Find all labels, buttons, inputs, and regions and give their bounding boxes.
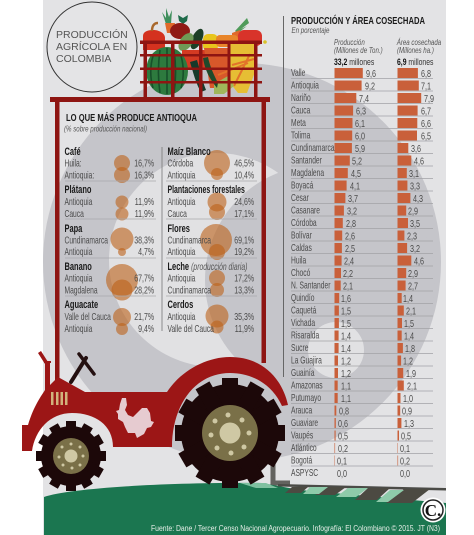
production values: 1,2 bbox=[341, 355, 351, 367]
right column labels: Flores bbox=[167, 221, 190, 234]
row lines bbox=[291, 78, 433, 466]
column header: área cosechada bbox=[396, 37, 441, 67]
department labels: Amazonas bbox=[291, 379, 323, 391]
department labels: Meta bbox=[291, 117, 306, 128]
column header: producción: (Millones de Ton.) bbox=[334, 46, 383, 55]
area values: 2,9 bbox=[408, 205, 418, 217]
production values: 7,4 bbox=[359, 93, 369, 104]
production values: 4,5 bbox=[351, 168, 361, 179]
left column values: 21,7% bbox=[134, 311, 154, 322]
production values: 2,2 bbox=[343, 268, 353, 279]
production values: 3,2 bbox=[347, 205, 357, 217]
production values: 2,4 bbox=[344, 255, 354, 267]
icon: crate of vegetables bbox=[140, 8, 267, 97]
production values: 3,7 bbox=[348, 193, 358, 204]
area values: 1,5 bbox=[404, 318, 414, 329]
production values: 5,2 bbox=[352, 155, 362, 167]
right column labels: Leche (producción diaria) bbox=[167, 259, 248, 272]
title circle: PRODUCCIÓN bbox=[56, 28, 128, 41]
production values: 2,6 bbox=[345, 230, 355, 242]
area values: 6,5 bbox=[421, 130, 431, 142]
right column labels: Plantaciones forestales bbox=[167, 183, 245, 195]
left column values: 11,9% bbox=[135, 196, 154, 207]
left column values: 4,7% bbox=[138, 246, 154, 257]
area values: 7,9 bbox=[424, 93, 434, 104]
production values: 0,1 bbox=[337, 455, 347, 467]
production values: 1,2 bbox=[341, 368, 351, 379]
production values: 0,6 bbox=[338, 418, 348, 429]
area values: 3,1 bbox=[409, 168, 419, 179]
column header: producción bbox=[334, 38, 383, 67]
left column labels: Antioquia bbox=[65, 196, 93, 207]
right column labels: Cerdos bbox=[167, 297, 193, 310]
left column labels: Antioquia bbox=[65, 272, 93, 284]
department labels: Guaviare bbox=[291, 417, 318, 428]
production values: 6,3 bbox=[356, 105, 366, 117]
department labels: Putumayo bbox=[291, 392, 321, 403]
area values: 2,1 bbox=[406, 305, 416, 317]
tractor body bbox=[22, 357, 288, 451]
left column values: 16,7% bbox=[134, 157, 154, 169]
area values: 0,1 bbox=[400, 443, 410, 454]
department labels: Cundinamarca bbox=[291, 142, 335, 153]
left column labels: Plátano bbox=[64, 182, 92, 195]
right column labels: Cundinamarca bbox=[167, 284, 211, 296]
right column values: 13,3% bbox=[234, 284, 254, 296]
left column labels: Cundinamarca bbox=[65, 234, 108, 246]
right column values: 19,2% bbox=[234, 246, 254, 257]
department labels: Antioquia bbox=[291, 79, 319, 91]
production values: 5,9 bbox=[355, 143, 365, 154]
area values: 3,6 bbox=[411, 143, 421, 154]
right column labels: Antioquia bbox=[167, 196, 196, 207]
department labels: Arauca bbox=[291, 404, 312, 416]
department labels: Caquetá bbox=[291, 304, 317, 316]
right column labels bbox=[168, 144, 248, 334]
right column labels: Antioquia bbox=[167, 169, 196, 181]
right column labels: Córdoba bbox=[167, 157, 193, 169]
production values: 6,0 bbox=[355, 130, 365, 142]
area values: 3,5 bbox=[410, 218, 420, 229]
department labels: Córdoba bbox=[291, 217, 317, 228]
icon: tractor bbox=[22, 351, 288, 491]
left column labels: Antioquia bbox=[65, 323, 93, 334]
front wheel bbox=[36, 421, 106, 491]
column header: producción: 33,2 millones bbox=[334, 57, 374, 67]
panel: production and harvested area bbox=[284, 14, 441, 479]
production values: 1,5 bbox=[341, 318, 351, 329]
area values: 7,1 bbox=[421, 80, 431, 92]
department labels: Valle bbox=[291, 67, 306, 78]
area values: 1,0 bbox=[403, 393, 413, 404]
right column labels: Cundinamarca bbox=[167, 234, 211, 246]
right column values: 24,6% bbox=[234, 196, 254, 207]
area values: 0,5 bbox=[401, 430, 411, 442]
heading: producción y área cosechada: PRODUCCIÓN Y ÁREA COSECHADA bbox=[291, 14, 425, 27]
icon: map of Antioquia bbox=[116, 398, 154, 438]
area values: 2,7 bbox=[408, 280, 418, 292]
department labels: Cesar bbox=[291, 192, 309, 203]
department labels: Caldas bbox=[291, 242, 312, 253]
area values bbox=[400, 68, 434, 479]
production values: 1,1 bbox=[341, 393, 351, 404]
column header: área cosechada: 6,9 millones bbox=[397, 57, 433, 67]
left column labels: Aguacate bbox=[64, 297, 98, 310]
left column labels: Cauca bbox=[65, 208, 84, 219]
production values: 1,6 bbox=[341, 293, 351, 304]
department labels: Casanare bbox=[291, 204, 320, 216]
right column labels: Antioquia bbox=[167, 311, 196, 322]
production values: 1,4 bbox=[341, 330, 351, 342]
area values: 6,6 bbox=[421, 118, 431, 129]
department labels: Nariño bbox=[291, 92, 311, 103]
department labels: Sucre bbox=[291, 342, 309, 353]
heading: lo que más produce: LO QUE MÁS PRODUCE ANTIOQUA bbox=[66, 111, 197, 124]
table dividers bbox=[65, 147, 257, 331]
area values: 3,2 bbox=[410, 243, 420, 254]
area values: 6,8 bbox=[421, 68, 431, 79]
production values: 0,2 bbox=[338, 443, 348, 454]
right column labels: Maíz Blanco bbox=[167, 144, 211, 157]
left column values: 67,7% bbox=[134, 272, 154, 284]
department labels bbox=[291, 67, 335, 478]
left column labels: Huila: bbox=[65, 157, 82, 169]
right column values: 17,1% bbox=[234, 208, 254, 219]
right column values bbox=[234, 157, 254, 334]
logo: El Colombiano: C. bbox=[425, 501, 441, 520]
left column labels: Magdalena bbox=[65, 284, 98, 296]
left column values: 11,9% bbox=[135, 208, 154, 219]
icon: grille bbox=[51, 392, 68, 405]
area values: 1,9 bbox=[406, 368, 416, 379]
column header: producción: Producción bbox=[334, 38, 365, 47]
production values: 4,1 bbox=[350, 180, 360, 192]
area values: 1,4 bbox=[404, 330, 414, 342]
area values: 6,7 bbox=[421, 105, 431, 117]
department labels: Santander bbox=[291, 154, 322, 166]
area values: 2,9 bbox=[408, 268, 418, 279]
department labels: La Guajira bbox=[291, 354, 322, 366]
department labels: Guainía bbox=[291, 367, 315, 378]
column header: área cosechada: Área cosechada bbox=[396, 37, 441, 47]
right column labels: Antioquia bbox=[167, 272, 196, 284]
production values bbox=[337, 68, 376, 479]
left column values: 38,3% bbox=[134, 234, 154, 246]
department labels: Huila bbox=[291, 254, 306, 266]
area values: 0,0 bbox=[400, 468, 410, 479]
department labels: Quindío bbox=[291, 292, 315, 303]
production values: 1,4 bbox=[341, 343, 351, 354]
department labels: Vichada bbox=[291, 317, 315, 328]
area values: 1,8 bbox=[405, 343, 415, 354]
area values: 1,2 bbox=[403, 355, 413, 367]
panel: what Antioquia produces bbox=[50, 97, 270, 381]
column header: área cosechada: (Millones ha.) bbox=[397, 46, 434, 55]
title circle bbox=[47, 2, 137, 92]
department labels: Risaralda bbox=[291, 329, 319, 341]
production values: 0,5 bbox=[338, 430, 348, 442]
department labels: Vaupés bbox=[291, 429, 313, 441]
production values: 2,5 bbox=[345, 243, 355, 254]
left column labels: Antioquia bbox=[65, 246, 93, 257]
subtitle: En porcentaje bbox=[291, 26, 329, 35]
production values: 2,8 bbox=[346, 218, 356, 229]
area values: 3,3 bbox=[410, 180, 420, 192]
bar chart: production bbox=[334, 68, 363, 466]
production values: 0,0 bbox=[337, 468, 347, 479]
production values: 0,8 bbox=[339, 405, 349, 417]
area values: 1,4 bbox=[403, 293, 413, 304]
area values: 2,1 bbox=[407, 380, 417, 392]
department labels: Bogotá bbox=[291, 454, 312, 466]
left column labels bbox=[64, 144, 111, 334]
production values: 1,5 bbox=[341, 305, 351, 317]
icon: steering wheel bbox=[71, 354, 94, 382]
department labels: Magdalena bbox=[291, 167, 324, 178]
area values: 1,3 bbox=[404, 418, 414, 429]
bubbles bbox=[106, 150, 232, 335]
title circle: COLOMBIA bbox=[56, 53, 111, 65]
left column labels: Papa bbox=[64, 221, 83, 234]
department labels: ASPYSC bbox=[291, 467, 318, 478]
area values: 4,6 bbox=[414, 155, 424, 167]
right column values: 11,9% bbox=[235, 323, 254, 334]
rear wheel bbox=[175, 378, 285, 488]
production values: 9,6 bbox=[366, 68, 376, 79]
ground bbox=[44, 460, 446, 535]
left column labels: Antioquia: bbox=[65, 169, 94, 181]
department labels: Chocó bbox=[291, 267, 311, 278]
right column values: 35,3% bbox=[234, 311, 254, 322]
production values: 1,1 bbox=[341, 380, 351, 392]
left column labels: Valle del Cauca bbox=[65, 311, 111, 322]
department labels: Boyacá bbox=[291, 179, 314, 191]
left column values bbox=[134, 157, 154, 334]
production values: 6,1 bbox=[355, 118, 365, 129]
left column values: 9,4% bbox=[138, 323, 154, 334]
production values: 2,1 bbox=[343, 280, 353, 292]
right column labels: Antioquia bbox=[167, 246, 196, 257]
right column values: 10,4% bbox=[234, 169, 254, 181]
right column values: 46,5% bbox=[234, 157, 254, 169]
title circle: AGRÍCOLA EN bbox=[56, 40, 127, 53]
production values: 9,2 bbox=[365, 80, 375, 92]
area values: 0,9 bbox=[402, 405, 412, 417]
department labels: Cauca bbox=[291, 104, 311, 116]
area values: 4,3 bbox=[413, 193, 423, 204]
area values: 0,2 bbox=[400, 455, 410, 467]
right column labels: Cauca bbox=[167, 208, 187, 219]
logo: El Colombiano bbox=[420, 498, 446, 522]
right column values: 17,2% bbox=[234, 272, 254, 284]
department labels: Atlántico bbox=[291, 442, 317, 453]
subtitle: (% sobre producción nacional) bbox=[64, 125, 147, 134]
left column labels: Café bbox=[64, 144, 81, 157]
left column values: 28,2% bbox=[134, 284, 154, 296]
left column values: 16,3% bbox=[134, 169, 154, 181]
right column labels: Valle del Cauca bbox=[167, 323, 214, 334]
department labels: Tolima bbox=[291, 129, 311, 141]
area values: 4,6 bbox=[414, 255, 424, 267]
department labels: N. Santander bbox=[291, 279, 331, 291]
left column labels: Banano bbox=[64, 259, 92, 272]
right column values: 69,1% bbox=[234, 234, 254, 246]
department labels: Bolívar bbox=[291, 229, 312, 241]
area values: 2,3 bbox=[407, 230, 417, 242]
bar chart: harvested area bbox=[398, 68, 421, 466]
